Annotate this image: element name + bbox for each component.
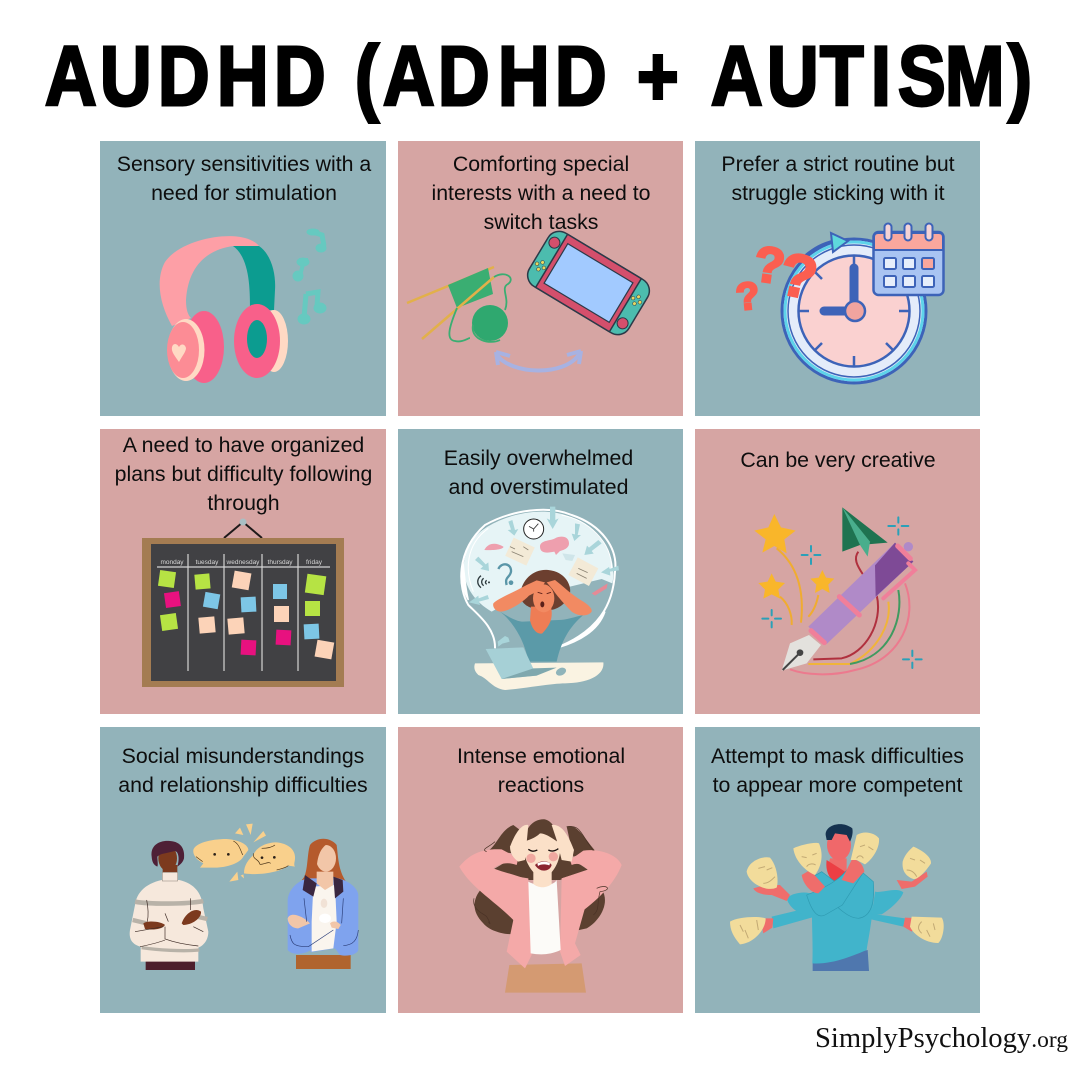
panel: overwhelmed	[398, 429, 683, 714]
text: masking: Attempt to mask difficulties	[711, 744, 964, 768]
icon: clock	[782, 233, 926, 383]
icon: question marks: ?	[750, 235, 788, 295]
text: emotional reactions: reactions	[498, 773, 584, 797]
text: special interests: interests with a need to	[431, 181, 651, 205]
title: (ADHD	[355, 28, 607, 123]
illustration: screaming woman	[459, 819, 622, 993]
text: organized plans: plans but difficulty following	[115, 462, 372, 486]
panel: sensory sensitivities	[100, 141, 386, 416]
text: sensory sensitivities: need for stimulation	[151, 181, 337, 205]
text: social misunderstandings: and relationship difficulties	[118, 773, 368, 797]
arrow: switching	[496, 351, 581, 371]
icon: overwhelmed woman	[461, 507, 619, 690]
text: overwhelmed: Easily overwhelmed	[444, 446, 633, 470]
text: emotional reactions: Intense emotional	[457, 744, 625, 768]
title: AUTISM)	[711, 28, 1032, 123]
panel: special interests	[398, 141, 683, 416]
panel: organized plans	[100, 429, 386, 714]
panel: creative	[695, 429, 980, 714]
icon: kanban board: monday	[160, 559, 184, 566]
text: routine: struggle sticking with it	[731, 181, 945, 205]
text: creative: Can be very creative	[740, 448, 936, 472]
text: special interests: switch tasks	[484, 210, 598, 234]
illustration: woman arms crossed	[288, 839, 358, 969]
text: routine: Prefer a strict routine but	[721, 152, 955, 176]
icon: game console	[523, 227, 654, 339]
panel: masking	[695, 727, 980, 1013]
source credit: SimplyPsychology.org	[815, 1023, 1069, 1054]
text: social misunderstandings: Social misunderstandings	[122, 744, 364, 768]
text: masking: to appear more competent	[713, 773, 962, 797]
icon: kanban board	[142, 518, 344, 687]
icon: calendar	[874, 224, 944, 295]
icon: broken speech bubbles	[193, 824, 295, 882]
icon: headphones	[160, 236, 288, 383]
icon: knitting	[407, 267, 511, 342]
text: sensory sensitivities: Sensory sensitivities with a	[117, 152, 371, 176]
icon: kanban board: thursday	[268, 559, 293, 566]
text: organized plans: A need to have organized	[123, 433, 364, 457]
panel: routine	[695, 141, 980, 416]
title: +	[637, 28, 679, 123]
icon: question marks: ?	[734, 275, 761, 319]
panel: emotional reactions	[398, 727, 683, 1013]
panel: social misunderstandings	[100, 727, 386, 1013]
title: AUDHD	[45, 28, 326, 123]
icon: question marks	[734, 235, 823, 319]
title	[45, 28, 1032, 123]
text: overwhelmed: and overstimulated	[449, 475, 628, 499]
text: special interests: Comforting special	[453, 152, 629, 176]
icon: creative pen	[754, 507, 922, 674]
icon: kanban board: wednesday	[226, 559, 260, 566]
icon: kanban board: friday	[306, 559, 323, 566]
text: organized plans: through	[207, 491, 280, 515]
illustration: man arms crossed	[130, 841, 208, 970]
icon: music notes	[293, 229, 326, 324]
icon: question marks: ?	[773, 239, 823, 313]
icon: kanban board: tuesday	[196, 559, 219, 566]
illustration: person with masks	[730, 824, 944, 971]
